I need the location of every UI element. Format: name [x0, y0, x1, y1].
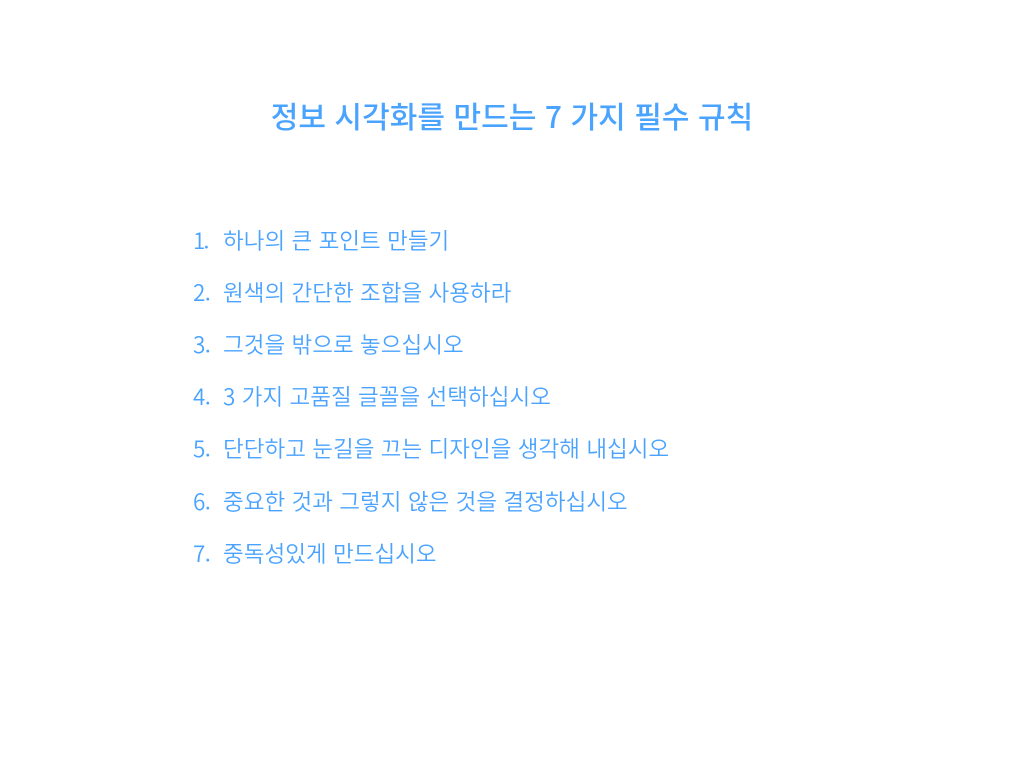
rule 7: 중독성있게 만드십시오: [223, 537, 437, 569]
rule 4: 3 가지 고품질 글꼴을 선택하십시오: [223, 380, 551, 412]
rule 7: 7.: [193, 537, 210, 569]
rule 2: 2.: [193, 276, 210, 308]
rule 6: 6.: [193, 485, 210, 517]
numbered list of rules: [193, 224, 669, 569]
rule 5: 단단하고 눈길을 끄는 디자인을 생각해 내십시오: [223, 432, 669, 464]
rule 5: 5.: [193, 432, 210, 464]
rule 1: 하나의 큰 포인트 만들기: [223, 224, 449, 256]
rule 2: 원색의 간단한 조합을 사용하라: [223, 276, 511, 308]
rule 3: 3.: [193, 328, 210, 360]
rule 1: 1.: [193, 224, 207, 256]
rule 6: 중요한 것과 그렇지 않은 것을 결정하십시오: [223, 485, 628, 517]
rule 4: 4.: [193, 380, 210, 412]
rule 3: 그것을 밖으로 놓으십시오: [223, 328, 464, 360]
title: 정보 시각화를 만드는 7 가지 필수 규칙: [271, 93, 753, 137]
